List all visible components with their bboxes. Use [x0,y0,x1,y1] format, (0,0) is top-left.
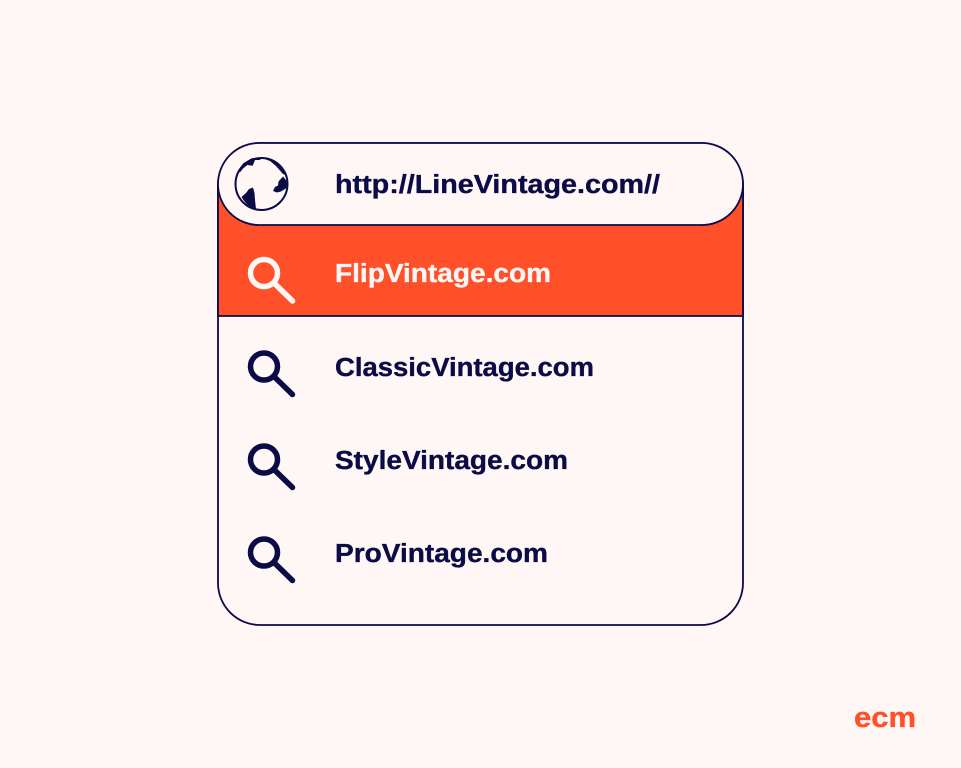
label: address URL: http://LineVintage.com// [335,171,660,199]
highlighted row: FlipVintage.com [218,184,743,316]
row: ProVintage.com [250,539,548,580]
row: StyleVintage.com [250,446,568,488]
icon: globe [236,157,288,210]
row: ClassicVintage.com [250,353,594,394]
label: FlipVintage.com: FlipVintage.com [335,260,551,288]
icon: search [250,353,292,394]
address bar [218,143,743,225]
icon: search [250,446,292,488]
logo: ecm: ecm [854,702,916,734]
icon: search white [250,260,292,301]
panel: browser search dropdown [218,143,743,625]
address bar pill [218,143,743,225]
panel outline [218,143,743,625]
row background [218,184,743,316]
label: ProVintage.com: ProVintage.com [335,540,548,568]
label: ClassicVintage.com: ClassicVintage.com [335,354,594,382]
icon: search [250,539,292,580]
label: StyleVintage.com: StyleVintage.com [335,447,568,475]
